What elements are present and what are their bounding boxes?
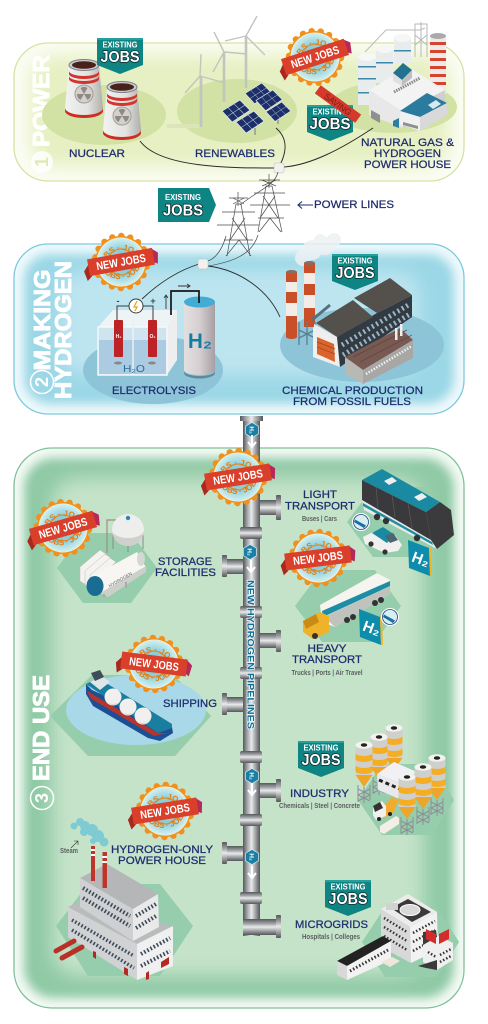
- microgrids illustration: hospital: [337, 894, 453, 980]
- badge: new jobs pipeline: JOBS · JOBS: [220, 460, 255, 471]
- nuclear platform and cooling towers: [42, 60, 166, 145]
- badge: new jobs shipping: NEW JOBS: [128, 656, 180, 674]
- label: storage facilities: FACILITIES: [155, 567, 216, 579]
- badge: new jobs electrolysis: JOBS · JOBS: [106, 268, 140, 280]
- badge: new jobs shipping: JOBS · JOBS: [139, 647, 174, 658]
- badge: new jobs pipeline: NEW JOBS: [213, 468, 264, 488]
- badge: new jobs power: NEW JOBS: [290, 44, 341, 71]
- label: power lines: POWER LINES: [314, 199, 394, 211]
- arrow: power lines: [298, 202, 313, 208]
- badge: new jobs electrolysis: NEW JOBS: [96, 253, 147, 273]
- badge: existing jobs power lines: JOBS: [163, 202, 203, 220]
- badge: new jobs power house: NEW JOBS: [140, 802, 191, 822]
- electrolysis cell and hydrogen tank: H₂: [116, 334, 121, 340]
- label: steam: [60, 841, 78, 855]
- badge: new jobs power house: [128, 782, 202, 840]
- label: natural gas and hydrogen power house: NATURAL GAS &: [361, 137, 455, 149]
- hydrogen cables: [142, 264, 280, 317]
- label: light transport: Buses | Cars: [302, 516, 337, 523]
- renewables platform, wind turbines and solar panels: [167, 16, 297, 143]
- label: chemical production from fossil fuels: FROM FOSSIL FUELS: [293, 396, 411, 408]
- pipe couplings: [240, 527, 262, 904]
- badge: new jobs power: [280, 28, 352, 86]
- electrolysis cell and hydrogen tank: +: [150, 296, 156, 306]
- badge: new jobs transport: [280, 528, 356, 588]
- label: storage facilities: STORAGE: [158, 556, 212, 568]
- heavy transport illustration: truck and H2 sign: H₂: [360, 618, 383, 640]
- heading: 3 end use: 3: [32, 793, 52, 803]
- badge: new jobs pipeline: JOBS · JOBS: [222, 482, 256, 494]
- panel: making hydrogen: [13, 232, 465, 415]
- label: shipping: SHIPPING: [163, 698, 217, 710]
- shipping illustration: [66, 670, 206, 745]
- badge: existing jobs chemical: [332, 254, 378, 290]
- badge: saving existing jobs: JOBS: [310, 116, 351, 133]
- heading: 2 making hydrogen: MAKING: [29, 270, 55, 370]
- label: renewables: RENEWABLES: [195, 148, 275, 160]
- badge: existing jobs chemical: JOBS: [336, 265, 375, 282]
- electrolysis cell and hydrogen tank: H₂: [188, 330, 212, 353]
- hydrogen markers and flow arrows: H₂: [246, 548, 252, 556]
- heading: 1 power: 1: [32, 157, 52, 167]
- badge: saving existing jobs: [307, 85, 361, 141]
- label: heavy transport: Trucks | Ports | Air Travel: [292, 670, 363, 677]
- label: natural gas and hydrogen power house: [361, 137, 455, 171]
- hexagon backgrounds: [50, 487, 459, 977]
- badge: new jobs transport: JOBS · JOBS: [300, 541, 336, 552]
- label: nuclear: NUCLEAR: [69, 148, 125, 160]
- pipe branches: [222, 495, 281, 938]
- badge: new jobs storage: [27, 498, 100, 558]
- badge: existing jobs chemical: EXISTING: [338, 256, 372, 266]
- heavy transport illustration: truck and H2 sign: [303, 573, 399, 645]
- light transport illustration: bus, car and H2 sign: H₂: [409, 549, 432, 571]
- storage facilities illustration: HYDROGEN: [108, 571, 133, 588]
- hydrogen markers and flow arrows: H₂: [248, 772, 254, 780]
- power lines towers: [208, 172, 290, 266]
- label: hydrogen-only power house: [111, 844, 214, 867]
- badge: new jobs power: JOBS · JOBS: [301, 60, 334, 74]
- badge: new jobs storage: JOBS · JOBS: [44, 510, 78, 524]
- badge: new jobs transport: NEW JOBS: [293, 550, 344, 568]
- natural gas and hydrogen power house: [329, 22, 457, 133]
- pipeline: [222, 416, 281, 938]
- label: hydrogen-only power house: POWER HOUSE: [118, 855, 206, 867]
- label: light transport: LIGHT: [303, 489, 337, 501]
- heading: 2 making hydrogen: [29, 261, 76, 399]
- badge: new jobs storage: JOBS · JOBS: [49, 532, 82, 546]
- label: chemical production from fossil fuels: CHEMICAL PRODUCTION: [282, 385, 423, 397]
- light transport illustration: bus, car and H2 sign: [352, 469, 454, 576]
- panel: end use: [13, 416, 465, 1009]
- electrolysis cell and hydrogen tank: -: [116, 296, 120, 306]
- label: steam: Steam: [60, 848, 78, 855]
- heading: 3 end use: END USE: [28, 675, 54, 781]
- label: heavy transport: [292, 643, 363, 677]
- label: microgrids: [295, 919, 368, 941]
- power cables: [140, 128, 373, 168]
- label: new hydrogen pipelines: NEW HYDROGEN PIPELINES: [244, 580, 256, 729]
- heading: 2 making hydrogen: HYDROGEN: [50, 261, 76, 399]
- badge: new jobs power house: JOBS · JOBS: [147, 794, 182, 805]
- label: light transport: [285, 489, 355, 523]
- badge: new jobs shipping: [116, 634, 192, 694]
- label: industry: INDUSTRY: [290, 788, 350, 800]
- industry illustration: silos and cement truck: [356, 724, 446, 835]
- badge: new jobs shipping: JOBS · JOBS: [136, 670, 170, 681]
- label: hydrogen-only power house: HYDROGEN-ONLY: [111, 844, 214, 856]
- power socket: [274, 163, 284, 173]
- badge: existing jobs nuclear: [97, 38, 143, 74]
- label: chemical production from fossil fuels: [282, 385, 423, 408]
- label: industry: Chemicals | Steel | Concrete: [279, 803, 360, 810]
- badge: existing jobs nuclear: EXISTING: [102, 40, 138, 50]
- ribbon: saving: SAVING: [322, 91, 354, 117]
- label: industry: [279, 788, 360, 810]
- label: heavy transport: HEAVY: [308, 643, 347, 655]
- hydrogen markers and flow arrows: H₂: [248, 426, 254, 434]
- badge: new jobs pipeline: [200, 448, 276, 506]
- hydrogen markers and flow arrows: [244, 422, 258, 878]
- badge: new jobs storage: NEW JOBS: [38, 516, 89, 542]
- hydrogen socket: [198, 259, 208, 269]
- badge: existing jobs microgrids: JOBS: [328, 891, 368, 908]
- label: microgrids: MICROGRIDS: [295, 919, 368, 931]
- badge: existing jobs power lines: [158, 188, 216, 222]
- badge: existing jobs microgrids: EXISTING: [330, 882, 366, 892]
- label: natural gas and hydrogen power house: POWER HOUSE: [364, 159, 451, 171]
- hydrogen-only power house building: [56, 846, 173, 980]
- electrolysis cell and hydrogen tank: H₂O: [123, 364, 145, 375]
- hydrogen markers and flow arrows: H₂: [248, 853, 254, 861]
- badge: saving existing jobs: EXISTING: [312, 108, 348, 116]
- electrolysis cell and hydrogen tank: O₂: [149, 334, 156, 340]
- label: light transport: TRANSPORT: [285, 500, 355, 512]
- electrolysis cell and hydrogen tank: [83, 284, 223, 404]
- heading: 1 power: POWER: [28, 55, 54, 147]
- badge: new jobs electrolysis: [84, 232, 158, 292]
- badge: new jobs transport: JOBS · JOBS: [302, 564, 336, 575]
- steam clouds: [70, 818, 108, 846]
- badge: existing jobs industry: JOBS: [302, 752, 341, 769]
- badge: new jobs electrolysis: JOBS · JOBS: [103, 244, 138, 256]
- label: heavy transport: TRANSPORT: [292, 654, 362, 666]
- badge: existing jobs industry: EXISTING: [304, 744, 338, 752]
- panel: power: [13, 16, 465, 182]
- label: microgrids: Hospitals | Colleges: [302, 934, 360, 941]
- badge: new jobs power house: JOBS · JOBS: [150, 816, 183, 828]
- chemical production plant: [280, 233, 444, 384]
- label: natural gas and hydrogen power house: HYDROGEN: [374, 148, 441, 160]
- badge: existing jobs microgrids: [325, 880, 371, 916]
- storage facilities illustration: [80, 514, 146, 597]
- badge: existing jobs power lines: EXISTING: [165, 193, 201, 202]
- badge: new jobs power: JOBS · JOBS: [296, 40, 330, 54]
- label: electrolysis: ELECTROLYSIS: [112, 385, 196, 397]
- badge: existing jobs industry: [298, 741, 344, 777]
- heading: 2 making hydrogen: 2: [32, 377, 52, 387]
- label: storage facilities: [155, 556, 216, 579]
- badge: existing jobs nuclear: JOBS: [100, 49, 140, 66]
